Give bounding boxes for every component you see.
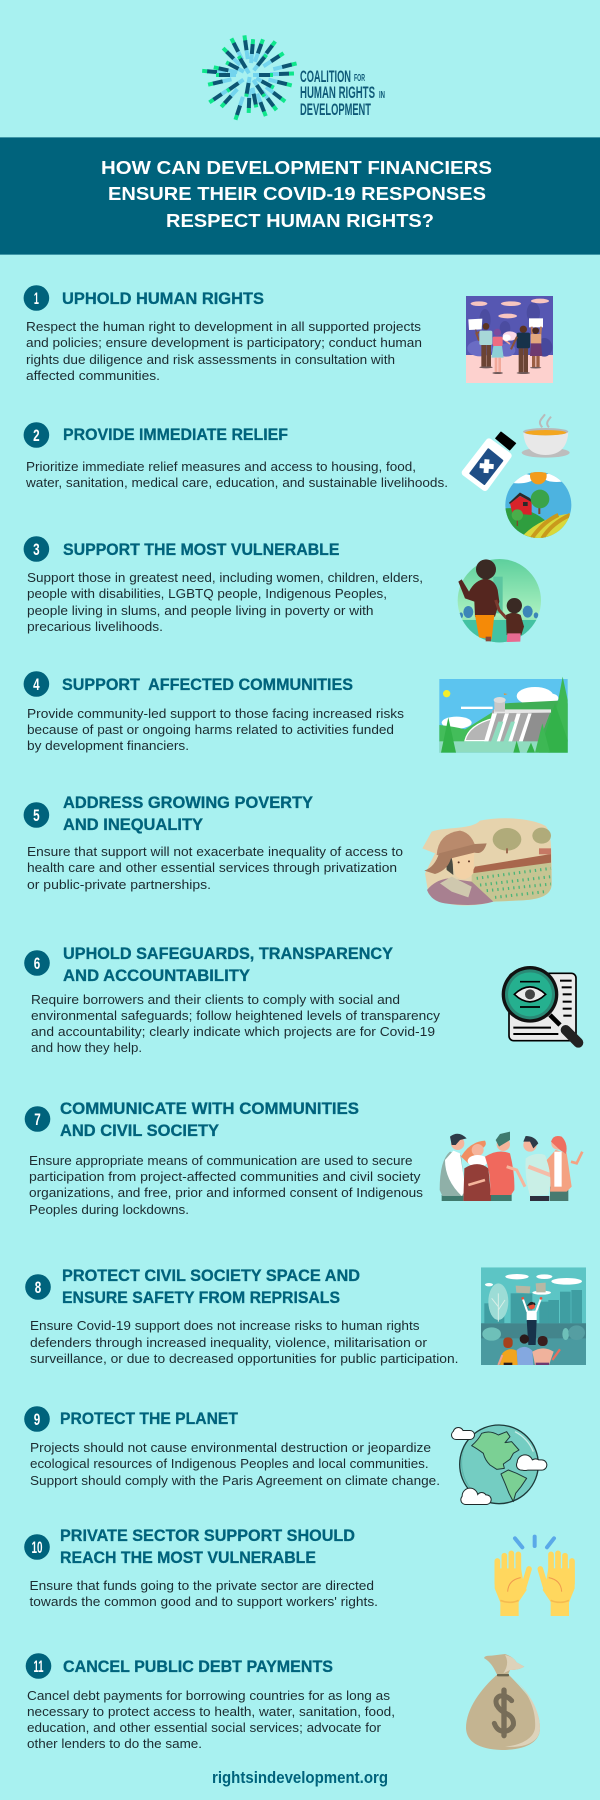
panel: 10 private sector support bbox=[24, 1526, 575, 1616]
body text 6: and how they help. bbox=[31, 1040, 142, 1055]
heading 7: COMMUNICATE WITH COMMUNITIES bbox=[60, 1099, 359, 1118]
body text 9: ecological resources of Indigenous Peoples and local communities. bbox=[30, 1456, 429, 1471]
body text 6: and accountability; clearly indicate which projects are for Covid-19 bbox=[31, 1024, 435, 1039]
heading 7 bbox=[60, 1099, 359, 1140]
body text 5 bbox=[27, 844, 403, 892]
heading 8 bbox=[62, 1266, 360, 1307]
number badge 11 bbox=[26, 1653, 51, 1679]
body text 1: affected communities. bbox=[26, 368, 160, 383]
icon: magnifying glass over document bbox=[502, 966, 578, 1043]
number badge 2 bbox=[24, 422, 49, 448]
heading 3: SUPPORT THE MOST VULNERABLE bbox=[63, 540, 340, 559]
body text 7 bbox=[29, 1153, 423, 1217]
body text 4: Provide community-led support to those facing increased risks bbox=[27, 706, 404, 721]
image: protesters with signs bbox=[466, 296, 553, 383]
number badge 7: 7 bbox=[34, 1110, 41, 1129]
logo wordmark: HUMAN RIGHTS bbox=[300, 84, 375, 102]
heading 1: UPHOLD HUMAN RIGHTS bbox=[62, 289, 264, 308]
icons: medicine, soup bowl, farm bbox=[465, 414, 572, 540]
heading 10: REACH THE MOST VULNERABLE bbox=[60, 1548, 316, 1567]
image: protesters before a city skyline bbox=[481, 1267, 586, 1365]
panel: 1 uphold human rights bbox=[24, 285, 553, 383]
heading 5 bbox=[63, 793, 314, 834]
number badge 10: 10 bbox=[32, 1538, 42, 1557]
body text 1: and policies; ensure development is participatory; conduct human bbox=[26, 335, 422, 350]
body text 11 bbox=[27, 1688, 395, 1751]
title bbox=[101, 157, 492, 231]
body text 6: environmental safeguards; follow heightened levels of transparency bbox=[31, 1008, 440, 1023]
icon: raised hands bbox=[495, 1537, 575, 1616]
title: RESPECT HUMAN RIGHTS? bbox=[166, 210, 434, 231]
image: hydroelectric dam bbox=[439, 677, 568, 753]
heading 6: AND ACCOUNTABILITY bbox=[63, 966, 251, 985]
logo wordmark bbox=[300, 68, 385, 119]
logo wordmark: FOR bbox=[354, 73, 365, 84]
number badge 6 bbox=[24, 950, 50, 976]
heading 9: PROTECT THE PLANET bbox=[60, 1409, 239, 1428]
heading 10 bbox=[60, 1526, 355, 1567]
body text 2: Prioritize immediate relief measures and access to housing, food, bbox=[26, 459, 416, 474]
body text 4: because of past or ongoing harms related to activities funded bbox=[27, 722, 394, 737]
body text 9: Support should comply with the Paris Agreement on climate change. bbox=[30, 1473, 440, 1488]
body text 4: by development financiers. bbox=[27, 738, 189, 753]
panel: 11 cancel public debt payments bbox=[26, 1653, 540, 1751]
body text 10: Ensure that funds going to the private sector are directed bbox=[30, 1578, 374, 1593]
body text 8: surveillance, or due to decreased opportunities for public participation. bbox=[30, 1351, 458, 1366]
image: adult and child looking outward bbox=[457, 558, 542, 643]
number badge 1 bbox=[24, 285, 49, 311]
body text 2: water, sanitation, medical care, education, and sustainable livelihoods. bbox=[25, 475, 448, 490]
number badge 3 bbox=[24, 536, 49, 562]
logo wordmark: IN bbox=[379, 90, 385, 101]
icon: earth with clouds bbox=[451, 1425, 547, 1505]
body text 1 bbox=[26, 319, 422, 383]
icon: money bag bbox=[466, 1654, 540, 1750]
body text 3: Support those in greatest need, including women, children, elders, bbox=[27, 570, 423, 585]
heading 8: PROTECT CIVIL SOCIETY SPACE AND bbox=[62, 1266, 360, 1285]
body text 7: organizations, and free, prior and informed consent of Indigenous bbox=[29, 1185, 423, 1200]
body text 1: rights due diligence and risk assessments in consultation with bbox=[26, 352, 395, 367]
body text 10 bbox=[30, 1578, 378, 1609]
heading 7: AND CIVIL SOCIETY bbox=[60, 1121, 220, 1140]
body text 11: necessary to protect access to health, water, sanitation, food, bbox=[27, 1704, 395, 1719]
heading 5: AND INEQUALITY bbox=[63, 815, 204, 834]
body text 8: Ensure Covid-19 support does not increase risks to human rights bbox=[30, 1318, 420, 1333]
number badge 8 bbox=[25, 1274, 51, 1300]
panel: 7 communicate with communities and civil society bbox=[25, 1099, 582, 1217]
panel: 9 protect the planet bbox=[24, 1406, 547, 1505]
body text 3 bbox=[27, 570, 423, 634]
panel: 5 address growing poverty and inequality bbox=[24, 793, 552, 906]
number badge 10 bbox=[24, 1534, 50, 1560]
title: HOW CAN DEVELOPMENT FINANCIERS bbox=[101, 157, 492, 178]
title band bbox=[0, 137, 600, 255]
body text 7: Ensure appropriate means of communication are used to secure bbox=[29, 1153, 412, 1168]
heading 5: ADDRESS GROWING POVERTY bbox=[63, 793, 314, 812]
body text 10: towards the common good and to support workers' rights. bbox=[30, 1594, 378, 1609]
number badge 1: 1 bbox=[34, 289, 39, 308]
panel: 6 uphold safeguards, transparency and accountability bbox=[24, 944, 578, 1055]
body text 3: people with disabilities, LGBTQ people, Indigenous Peoples, bbox=[27, 586, 387, 601]
image: group of people talking bbox=[440, 1132, 582, 1201]
panel: 3 support the most vulnerable bbox=[24, 536, 542, 643]
body text 9: Projects should not cause environmental destruction or jeopardize bbox=[30, 1440, 431, 1455]
body text 8 bbox=[30, 1318, 458, 1366]
body text 6: Require borrowers and their clients to comply with social and bbox=[31, 992, 400, 1007]
number badge 7 bbox=[25, 1106, 50, 1132]
number badge 3: 3 bbox=[33, 540, 40, 559]
body text 5: health care and other essential services through privatization bbox=[27, 860, 397, 875]
body text 1: Respect the human right to development in all supported projects bbox=[26, 319, 421, 334]
number badge 9: 9 bbox=[34, 1410, 40, 1429]
heading 8: ENSURE SAFETY FROM REPRISALS bbox=[62, 1288, 340, 1307]
panel: 2 provide immediate relief bbox=[24, 414, 572, 540]
number badge 6: 6 bbox=[34, 954, 40, 973]
title: ENSURE THEIR COVID-19 RESPONSES bbox=[108, 183, 486, 204]
heading 6: UPHOLD SAFEGUARDS, TRANSPARENCY bbox=[63, 944, 394, 963]
heading 2: PROVIDE IMMEDIATE RELIEF bbox=[63, 425, 288, 444]
logo wordmark: COALITION bbox=[300, 68, 351, 86]
icon: soup bowl bbox=[522, 414, 570, 458]
number badge 4: 4 bbox=[33, 675, 40, 694]
number badge 9 bbox=[24, 1406, 50, 1432]
body text 5: Ensure that support will not exacerbate inequality of access to bbox=[27, 844, 403, 859]
icon: medicine bottle bbox=[465, 432, 516, 488]
body text 11: other lenders to do the same. bbox=[27, 1736, 202, 1751]
footer url: rightsindevelopment.org bbox=[212, 1768, 388, 1787]
number badge 11: 11 bbox=[34, 1657, 44, 1676]
number badge 4 bbox=[24, 671, 49, 697]
number badge 5: 5 bbox=[33, 806, 40, 825]
body text 11: education, and other essential social services; advocate for bbox=[27, 1720, 382, 1735]
logo burst icon bbox=[202, 35, 297, 120]
body text 3: people living in slums, and people living in poverty or with bbox=[27, 603, 374, 618]
body text 11: Cancel debt payments for borrowing countries for as long as bbox=[27, 1688, 390, 1703]
body text 8: defenders through increased inequality, violence, militarisation or bbox=[30, 1335, 428, 1350]
heading 11: CANCEL PUBLIC DEBT PAYMENTS bbox=[63, 1657, 333, 1676]
body text 5: or public-private partnerships. bbox=[27, 877, 211, 892]
heading 4: SUPPORT AFFECTED COMMUNITIES bbox=[62, 675, 353, 694]
body text 7: participation from project-affected communities and civil society bbox=[29, 1169, 421, 1184]
number badge 5 bbox=[24, 802, 49, 828]
body text 9 bbox=[30, 1440, 440, 1488]
logo wordmark: DEVELOPMENT bbox=[300, 101, 371, 119]
body text 7: Peoples during lockdowns. bbox=[29, 1202, 189, 1217]
body text 4 bbox=[27, 706, 404, 753]
panel: 8 protect civil society space bbox=[25, 1266, 586, 1366]
number badge 2: 2 bbox=[33, 426, 40, 445]
body text 6 bbox=[31, 992, 440, 1055]
logo: Coalition for Human Rights in Development bbox=[202, 35, 385, 120]
number badge 8: 8 bbox=[35, 1278, 41, 1297]
clouds bbox=[451, 1427, 547, 1505]
body text 3: precarious livelihoods. bbox=[27, 619, 163, 634]
icon: farm landscape bbox=[505, 472, 572, 538]
panel: 4 support affected communities bbox=[24, 671, 568, 753]
image: farmer in a field bbox=[422, 818, 552, 906]
heading 6 bbox=[63, 944, 394, 985]
heading 10: PRIVATE SECTOR SUPPORT SHOULD bbox=[60, 1526, 355, 1545]
body text 2 bbox=[25, 459, 448, 490]
